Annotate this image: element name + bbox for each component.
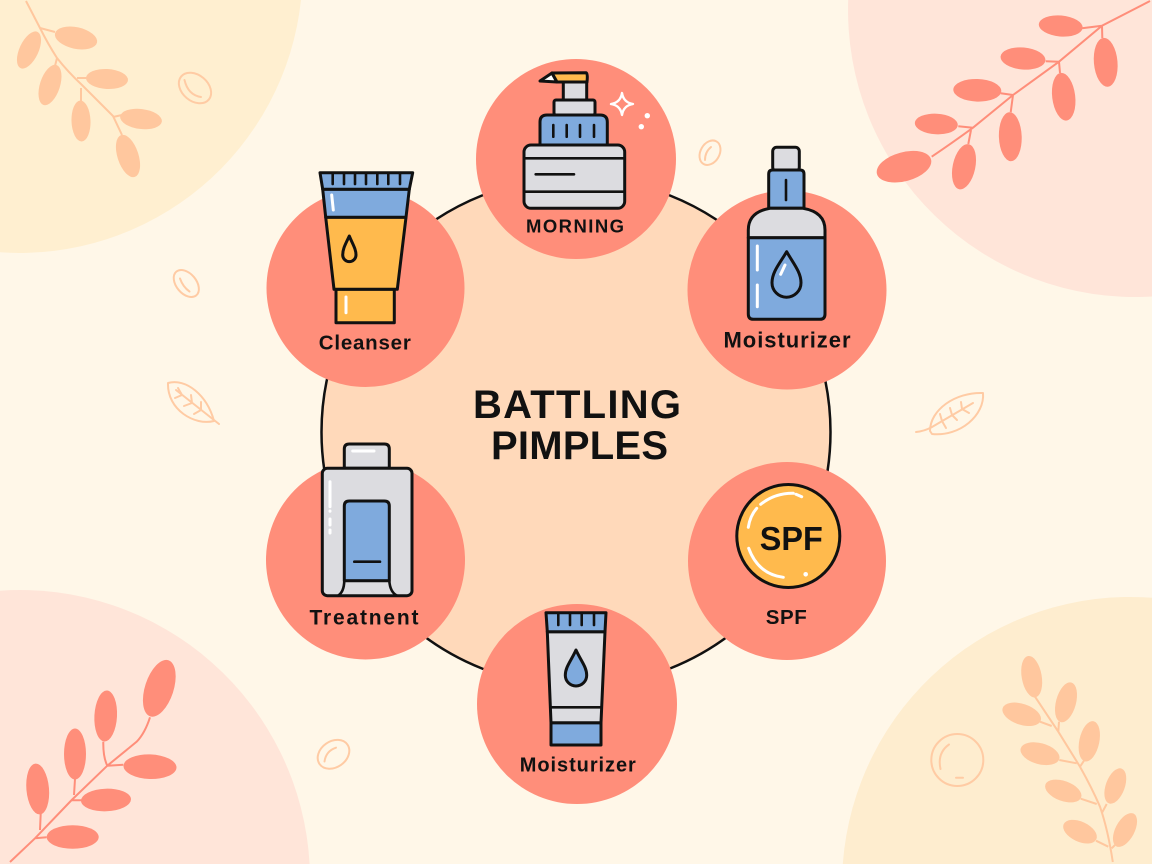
step: spf: [688, 462, 886, 660]
step: moisturizer spray: [688, 147, 886, 390]
icon: outline seed top: [695, 137, 725, 169]
corner decoration: bottom left: [0, 590, 310, 864]
icon: spf circle: [737, 484, 840, 588]
title: [473, 383, 681, 468]
title: BATTLING: [473, 383, 681, 427]
step: morning: [476, 59, 676, 259]
corner decoration: top left: [0, 0, 301, 253]
label: moisturizer: Moisturizer: [520, 755, 636, 777]
icon: outline leaf left: [168, 382, 219, 424]
title: PIMPLES: [491, 424, 668, 468]
label: treatment: Treatnent: [310, 606, 418, 629]
icon: treatment bottle: [322, 444, 412, 596]
icon: outline seed left: [169, 265, 204, 302]
icon: spray bottle: [748, 147, 825, 319]
corner decoration: top right: [848, 0, 1152, 297]
label: morning: MORNING: [526, 216, 624, 237]
label: cleanser: Cleanser: [319, 331, 411, 354]
icon: pump jar: [524, 73, 625, 208]
step: cleanser: [266, 173, 464, 387]
central circle: [322, 178, 830, 686]
icon: sparkle: [611, 93, 633, 115]
label: spf: SPF: [766, 606, 807, 629]
icon: outline seed top left: [173, 66, 217, 110]
icon: moisturizer tube: [546, 613, 606, 745]
icon: outline leaf right: [916, 393, 983, 434]
step: moisturizer tube: [477, 604, 677, 804]
icon: outline bubble: [931, 734, 983, 786]
icon: cleanser tube: [320, 173, 413, 323]
label: moisturizer: Moisturizer: [724, 327, 851, 352]
step: treatment: [266, 444, 465, 659]
icon: spf circle: SPF: [760, 521, 823, 558]
icon: outline seed bottom left: [312, 734, 355, 775]
icon: sparkle dots: [639, 113, 650, 129]
corner decoration: bottom right: [843, 597, 1152, 864]
